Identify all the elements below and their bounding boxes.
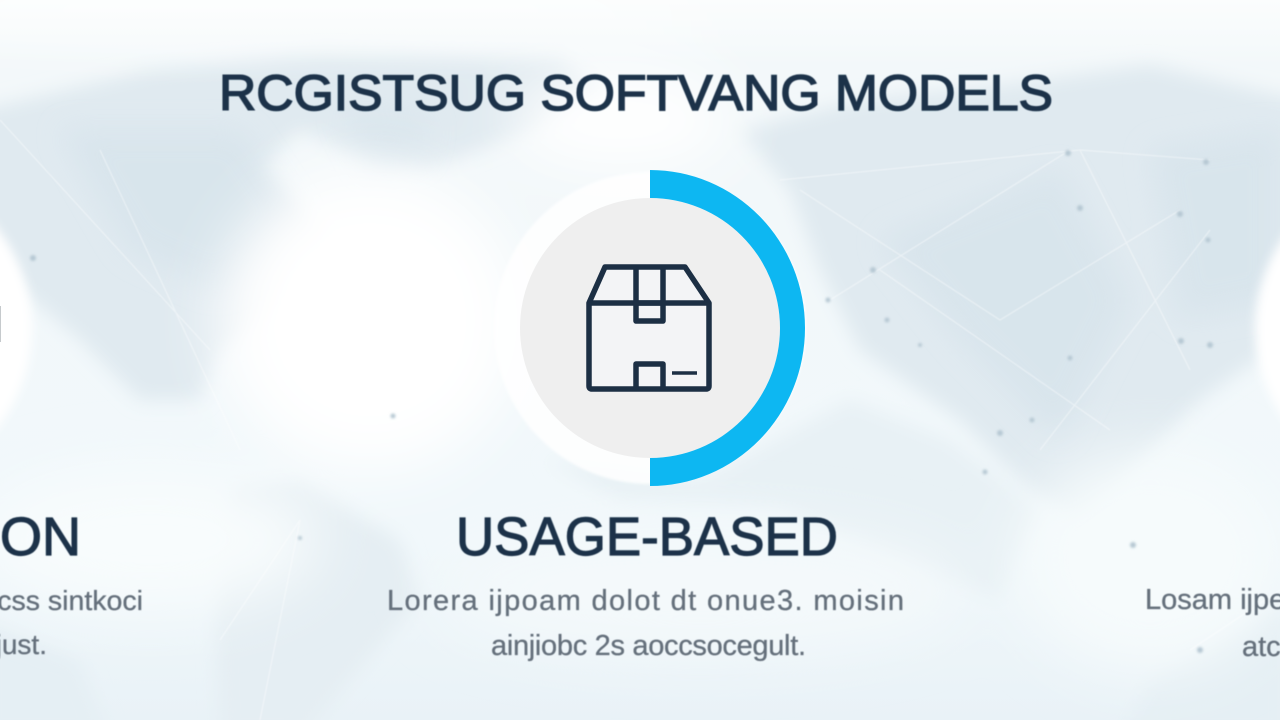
right offscreen circle — [1255, 171, 1280, 485]
left offscreen circle — [0, 168, 32, 488]
icon: package box — [589, 267, 709, 389]
left body text — [0, 585, 143, 660]
grey disc — [520, 198, 780, 458]
right column body text — [1145, 584, 1280, 663]
center body text: Lorera ijpoam dolot dt onue3. moisin — [387, 585, 904, 617]
blue progress arc — [650, 170, 805, 486]
title: RCGISTSUG SOFTVANG MODELS — [219, 65, 1053, 121]
left column: subscription fragment — [0, 507, 143, 660]
center body text — [387, 585, 904, 662]
center column text — [387, 507, 904, 662]
center model circle: usage-based — [494, 170, 806, 486]
network dots — [30, 150, 1213, 653]
center heading: USAGE-BASED — [456, 507, 838, 567]
center body text: ainjiobc 2s aoccsocegult. — [491, 630, 806, 662]
white halo — [494, 172, 806, 484]
left heading: ON — [0, 507, 81, 567]
